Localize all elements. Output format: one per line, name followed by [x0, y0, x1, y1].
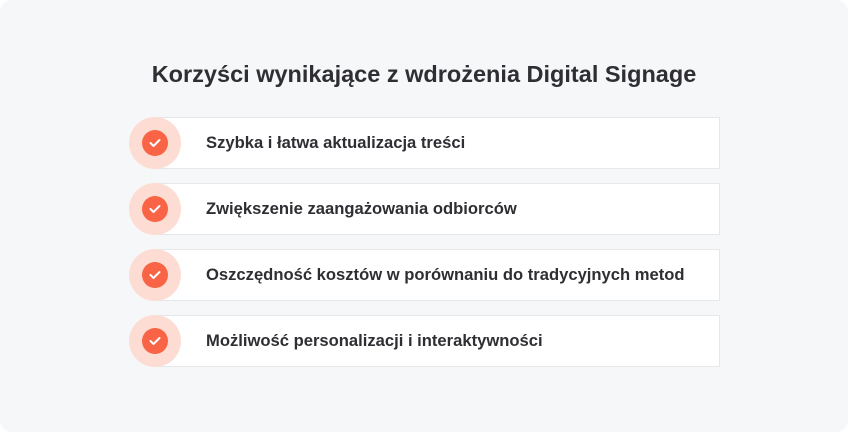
- item 2: Zwiększenie zaangażowania odbiorców: [206, 199, 517, 218]
- item 1: [129, 117, 720, 169]
- item 4: Możliwość personalizacji i interaktywności: [206, 331, 543, 350]
- item 3: Oszczędność kosztów w porównaniu do tradycyjnych metod: [206, 265, 685, 284]
- item 4: [129, 315, 720, 367]
- title: Korzyści wynikające z wdrożenia Digital Signage: [152, 61, 696, 87]
- item 1: Szybka i łatwa aktualizacja treści: [206, 133, 465, 152]
- item 2: [129, 183, 720, 235]
- item 3: [129, 249, 720, 301]
